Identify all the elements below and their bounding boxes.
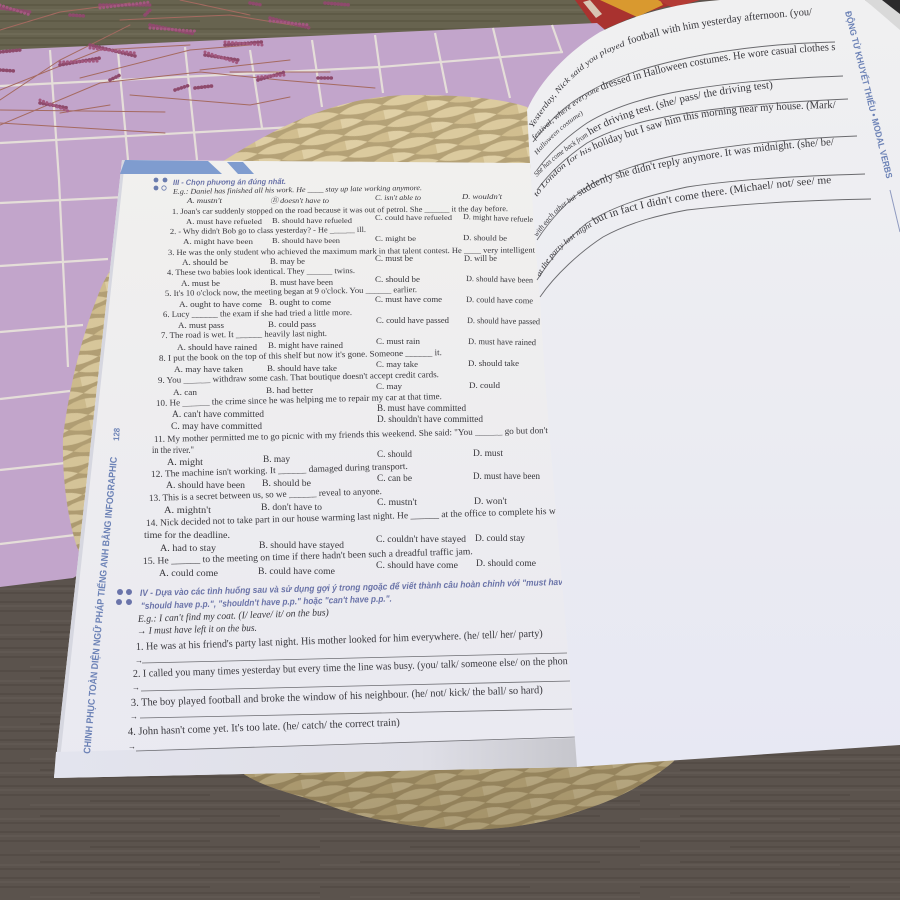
question 13: C. mustn't (377, 498, 417, 508)
question 2: C. might be (375, 234, 417, 243)
question 8 (159, 347, 519, 374)
question 11: A. might (167, 457, 204, 467)
question 6: C. could have passed (376, 316, 450, 325)
question 11: C. should (377, 449, 412, 459)
right page sentences (528, 8, 836, 276)
right page sentences: Halloween costume) (534, 111, 583, 155)
question 15: 15. He ______ to the meeting on time if there hadn't been such a dreadful traffic jam. (143, 546, 473, 567)
section IV heading: IV - Dựa vào các tình huống sau và sử dụng gợi ý trong ngoặc để viết thành câu hoàn chỉnh với "must hav (140, 577, 564, 598)
writing exercise 1: → (135, 656, 143, 665)
question 15: D. should come (476, 558, 536, 569)
question 14: D. could stay (475, 534, 525, 544)
right page sentences: with each other but (534, 194, 576, 236)
question 7: 7. The road is wet. It ______ heavily last night. (161, 328, 327, 340)
question 10: B. must have committed (377, 403, 467, 413)
question 7: D. must have rained (468, 336, 537, 347)
question 4: A. must be (181, 279, 220, 288)
question 12 (151, 461, 540, 490)
right page writing lines (533, 42, 871, 297)
question 4 (167, 266, 533, 288)
question 1: C. could have refueled (375, 213, 452, 222)
question 1: D. might have refuele (463, 212, 534, 224)
left page of book (54, 160, 578, 778)
question 12: C. can be (377, 473, 412, 483)
question 7: C. must rain (376, 336, 421, 346)
question 8: B. should have take (267, 363, 337, 373)
question 2: 2. - Why didn't Bob go to class yesterday? - He ______ ill. (170, 225, 366, 236)
question 13: 13. This is a secret between us, so we ______ reveal to anyone. (149, 487, 382, 504)
question 1 (172, 204, 534, 226)
question 11 (152, 425, 548, 467)
section III bullet dots (154, 178, 167, 190)
writing exercise 1 (135, 628, 567, 665)
question 11: B. may (263, 454, 291, 464)
question 10: D. shouldn't have committed (377, 414, 484, 424)
question 13: D. won't (474, 497, 507, 507)
section III example: A. mustn't (186, 196, 223, 205)
question 3 (168, 245, 536, 267)
question 14: time for the deadline. (144, 530, 230, 541)
wicker placemat (63, 95, 700, 830)
question 9 (158, 369, 501, 397)
question 1: B. should have refueled (272, 216, 352, 225)
question 6: D. should have passed (467, 316, 541, 326)
question 8: D. should take (468, 358, 519, 368)
question 6 (163, 308, 541, 330)
question 13: B. don't have to (261, 503, 322, 513)
question 5 (165, 285, 533, 309)
section IV example: → I must have left it on the bus. (137, 623, 257, 637)
question 7 (161, 328, 537, 352)
question 12: 12. The machine isn't working. It ______ damaged during transport. (151, 461, 408, 479)
question 10: 10. He ______ the crime since he was helping me to repair my car at that time. (156, 391, 442, 408)
dried pink flowers (0, 0, 375, 133)
right page of book (527, 0, 900, 767)
section III example (172, 183, 503, 205)
right page spine title: ĐỘNG TỪ KHUYẾT THIẾU • MODAL VERBS (843, 10, 895, 179)
right page sentences: to London for his (534, 148, 592, 196)
writing exercise 4 (128, 716, 575, 751)
question 3: A. should be (182, 258, 228, 267)
purple tiled mat (0, 23, 640, 587)
writing exercise 4: → (128, 742, 136, 751)
question 8: C. may take (376, 359, 418, 369)
question 13: A. mightn't (164, 506, 211, 516)
question 9: 9. You ______ withdraw some cash. That boutique doesn't accept credit cards. (158, 369, 439, 385)
section III example: Ⓑ doesn't have to (270, 196, 329, 205)
question 6: B. could pass (268, 320, 316, 329)
question 4: D. should have been (466, 274, 533, 285)
top right corner of book (865, 0, 900, 32)
question 3: D. will be (464, 254, 497, 263)
right page sentences: festival, where everyone (532, 88, 600, 141)
section IV example (137, 607, 330, 637)
question 10: A. can't have committed (172, 409, 265, 419)
question 5: A. ought to have come (179, 300, 262, 309)
question 7: A. should have rained (177, 342, 258, 352)
section III example: C. isn't able to (375, 193, 421, 202)
question 2: B. should have been (272, 236, 340, 245)
question 5: C. must have come (375, 295, 442, 304)
writing exercise 3: 3. The boy played football and broke the window of his neighbour. (he/ not/ kick/ the ball/ so hard) (131, 684, 543, 709)
question 10: C. may have committed (171, 421, 263, 431)
question 3: C. must be (375, 254, 413, 263)
question 12: A. should have been (166, 480, 245, 490)
question 15: C. should have come (376, 560, 458, 571)
question 1: A. must have refueled (186, 217, 262, 226)
section III heading: III - Chọn phương án đúng nhất. (173, 177, 286, 187)
right page sentences: Yesterday, Nick said you played (528, 40, 625, 128)
section IV heading: "should have p.p.", "shouldn't have p.p." hoặc "can't have p.p.". (141, 594, 392, 611)
right page sentences: holiday but I saw him this morning near my house. (Mark/ (591, 100, 836, 150)
right page sentences: suddenly she didn't reply anymore. It was midnight. (she/ be/ (577, 138, 834, 196)
question 3: 3. He was the only student who achieved the maximum mark in that talent contest. He ____ very intelligent (168, 245, 536, 257)
right page sentences: She has come back from (534, 134, 588, 177)
question 6: A. must pass (178, 321, 224, 330)
question 15 (143, 546, 536, 579)
question 3: B. may be (270, 257, 305, 266)
question 12: B. should be (262, 478, 311, 488)
right page sentences: at the party last night (538, 222, 592, 276)
section III example: E.g.: Daniel has finished all his work. He ____ stay up late working anymore. (172, 183, 422, 196)
page number: 128 (111, 427, 122, 441)
question 5: D. could have come (466, 295, 533, 305)
question 11: in the river." (152, 445, 194, 455)
question 8: A. may have taken (174, 364, 244, 374)
writing exercise 1: 1. He was at his friend's party last night. His mother looked for him everywhere. (he/ tell/ her/ party) (136, 628, 543, 653)
question 10 (156, 391, 484, 431)
question 9: C. may (376, 381, 403, 391)
section IV example: E.g.: I can't find my coat. (I/ leave/ it/ on the bus) (137, 607, 330, 625)
writing exercise 3: → (130, 712, 138, 721)
question 6: 6. Lucy ______ the exam if she had tried a little more. (163, 308, 352, 319)
question 13 (149, 487, 507, 516)
question 5: 5. It's 10 o'clock now, the meeting began at 9 o'clock. You ______ earlier. (165, 285, 417, 298)
section IV bullet dots (116, 589, 132, 605)
writing exercise 2 (132, 656, 570, 692)
writing exercise 2: → (132, 683, 140, 692)
question 4: B. must have been (270, 278, 333, 287)
question 14: 14. Nick decided not to take part in our house warming last night. He ______ at the office to complete his w (146, 506, 556, 529)
books at top edge (575, 0, 700, 32)
writing exercise 4: 4. John hasn't come yet. It's too late. (he/ catch/ the correct train) (128, 716, 400, 738)
question 9: B. had better (266, 385, 313, 395)
question 15: B. could have come (258, 566, 335, 577)
section III example: D. wouldn't (461, 192, 503, 201)
writing exercise 3 (130, 684, 572, 721)
question 14: A. had to stay (160, 544, 216, 554)
question 14 (144, 506, 556, 554)
question 4: 4. These two babies look identical. They ______ twins. (167, 266, 355, 277)
writing exercise 2: 2. I called you many times yesterday but every time the line was busy. (you/ talk/ someone else/ on the phon (133, 656, 569, 680)
left page spine title: CHINH PHỤC TOÀN DIỆN NGỮ PHÁP TIẾNG ANH BẰNG INFOGRAPHIC (81, 456, 120, 754)
question 2: D. should be (463, 233, 508, 243)
question 2 (170, 225, 508, 246)
question 11: D. must (473, 448, 504, 458)
question 12: D. must have been (473, 471, 540, 481)
question 11: 11. My mother permitted me to go picnic with my friends this weekend. She said: "You ______ go but don't (154, 425, 548, 444)
question 7: B. might have rained (268, 340, 344, 350)
question 14: B. should have stayed (259, 541, 344, 551)
question 9: A. can (173, 387, 198, 397)
right page spine rule (890, 190, 900, 232)
section IV heading (140, 577, 564, 611)
page header tabs (120, 160, 254, 174)
question 2: A. might have been (183, 237, 253, 246)
right page sentences: her driving test. (she/ pass/ the driving test) (586, 80, 772, 135)
question 5: B. ought to come (269, 298, 331, 307)
question 9: D. could (469, 380, 501, 390)
question 8: 8. I put the book on the top of this shelf but now it's gone. Someone ______ it. (159, 347, 442, 363)
question 15: A. could come (159, 568, 218, 579)
question 14: C. couldn't have stayed (376, 535, 466, 545)
question 4: C. should be (375, 275, 420, 284)
right page sentences: football with him yesterday afternoon. (you/ (628, 8, 812, 44)
question 1: 1. Joan's car suddenly stopped on the road because it was out of petrol. She ______ it the day before. (172, 204, 508, 216)
